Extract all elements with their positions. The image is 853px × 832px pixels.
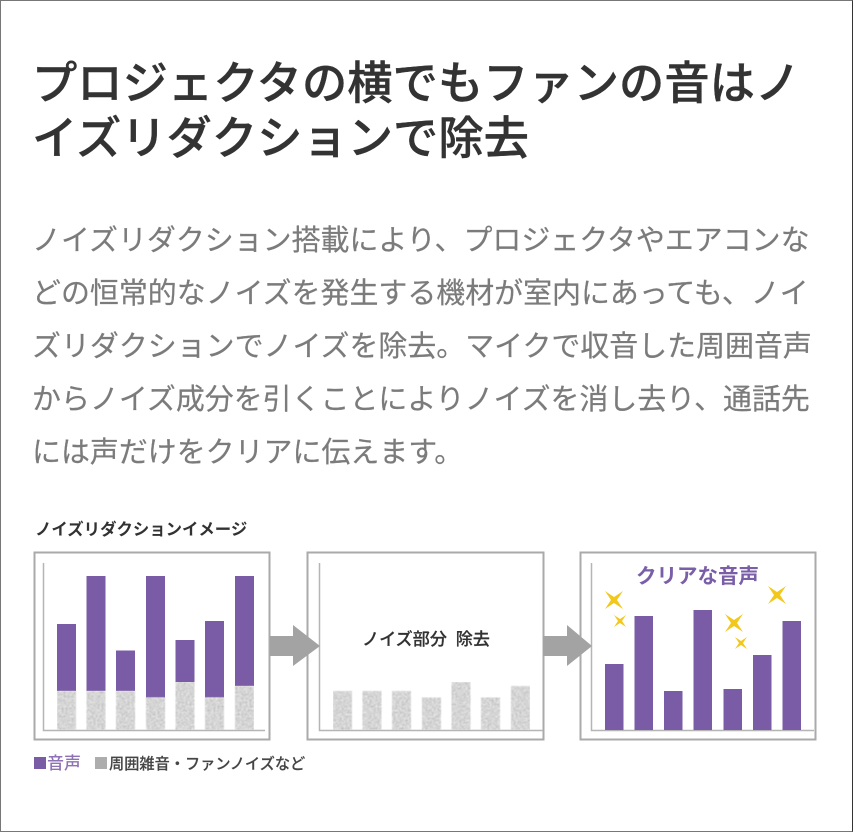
legend: voice: 音声 [47, 754, 81, 773]
body text: には声だけをクリアに伝えます。 [32, 437, 463, 469]
panel: clear voice [580, 552, 816, 740]
body text: ノイズリダクション搭載により、プロジェクタやエアコンな [32, 225, 810, 257]
panel: noise removal [308, 552, 544, 740]
voice bars [57, 576, 254, 698]
legend: ambient noise: 周囲雑音・ファンノイズなど [109, 755, 305, 773]
title: イズリダクションで除去 [32, 113, 529, 164]
arrow: before to noise removal [270, 625, 320, 666]
body text [32, 225, 812, 469]
clear voice label: クリアな音声 [636, 565, 759, 588]
body text: からノイズ成分を引くことによりノイズを消し去り、通話先 [32, 384, 810, 416]
sparkles [605, 586, 786, 649]
diagram heading: ノイズリダクションイメージ [35, 520, 247, 539]
noise removal label: ノイズ部分 除去 [362, 629, 490, 649]
title: プロジェクタの横でもファンの音はノ [32, 58, 800, 109]
body text: ズリダクションでノイズを除去。マイクで収音した周囲音声 [32, 331, 812, 363]
body text: どの恒常的なノイズを発生する機材が室内にあっても、ノイ [32, 278, 809, 310]
legend [34, 754, 305, 773]
arrow: noise removal to clear voice [543, 625, 592, 666]
panel: before, voice plus noise [34, 552, 270, 740]
voice bars [605, 610, 801, 730]
title [32, 58, 800, 164]
noise bars: before panel [57, 682, 254, 730]
noise bars: removal panel [333, 682, 530, 730]
